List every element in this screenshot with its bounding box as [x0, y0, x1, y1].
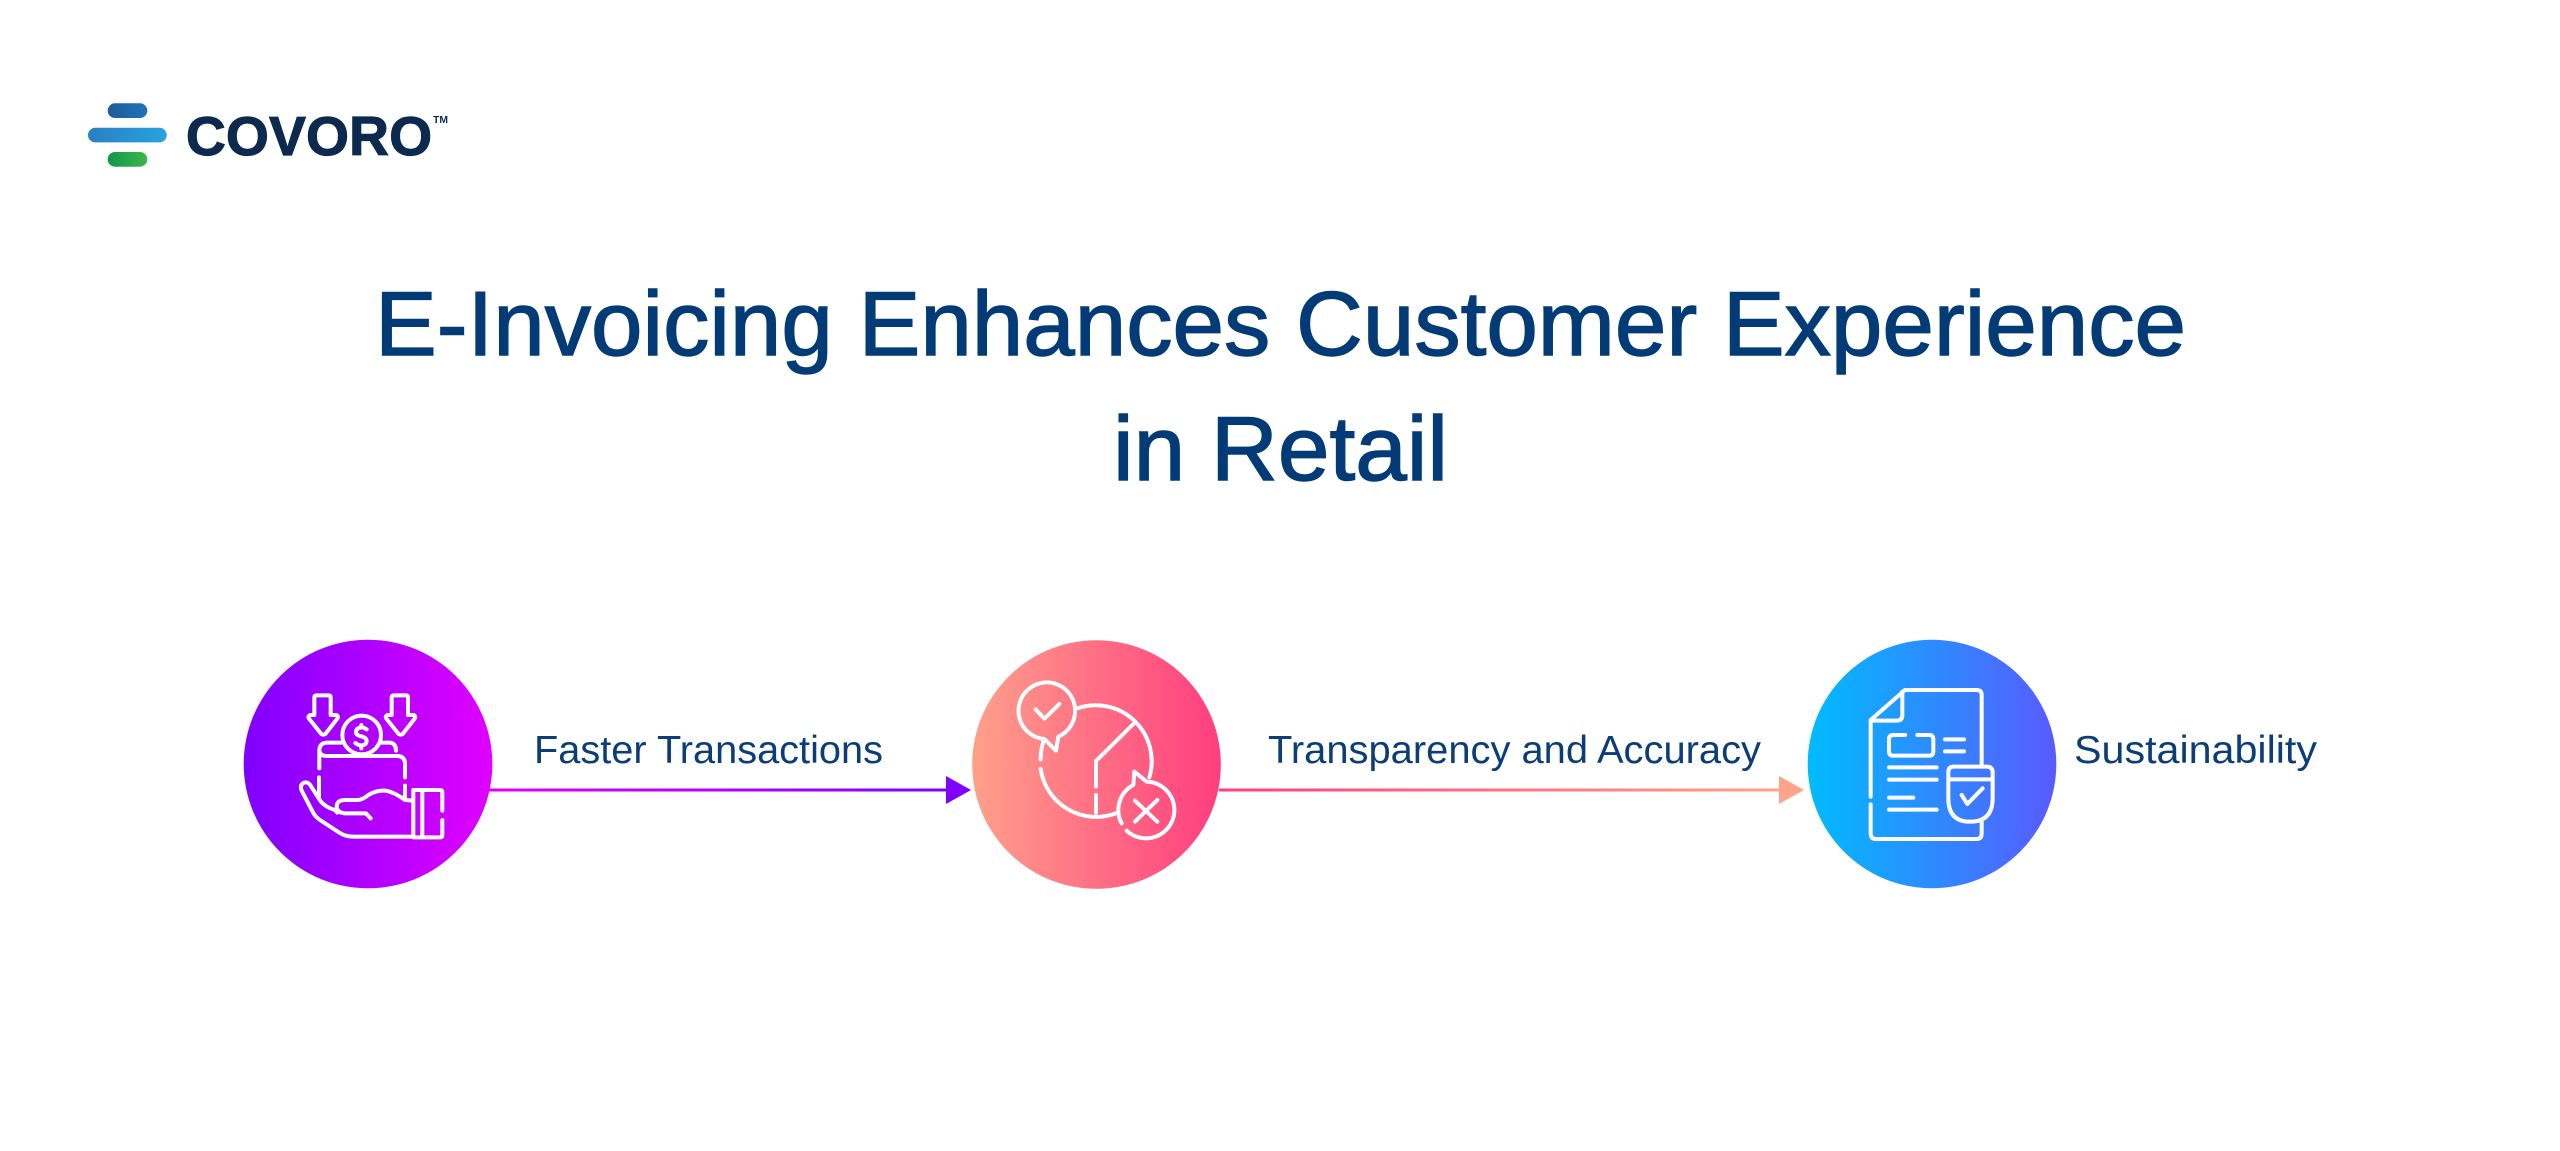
trademark: TM: [433, 115, 448, 126]
logo wordmark: COVORO: [186, 105, 432, 167]
title line 2: in Retail: [1113, 399, 1448, 500]
step 3: Sustainability icon circle: [1808, 640, 2056, 888]
connector arrow 1: [488, 776, 971, 804]
step 1: Faster Transactions icon circle: [244, 640, 492, 888]
step 2: Transparency and Accuracy icon circle: [972, 640, 1221, 889]
connector arrow 2: [1219, 776, 1804, 804]
title line 1: E-Invoicing Enhances Customer Experience: [375, 274, 2186, 375]
label: Faster Transactions: Faster Transactions: [534, 729, 883, 772]
title: [375, 274, 2186, 500]
icon: document with shield: [1871, 690, 1993, 839]
icon: pie chart with check and cross bubbles: [1018, 682, 1174, 838]
label: Transparency and Accuracy: Transparency and Accuracy: [1268, 729, 1762, 772]
icon: hand receiving wallet and coin: [301, 695, 442, 837]
label: Sustainability: Sustainability: [2074, 729, 2318, 772]
logo mark: three bars: [88, 103, 167, 167]
logo: Covoro: [88, 103, 448, 167]
